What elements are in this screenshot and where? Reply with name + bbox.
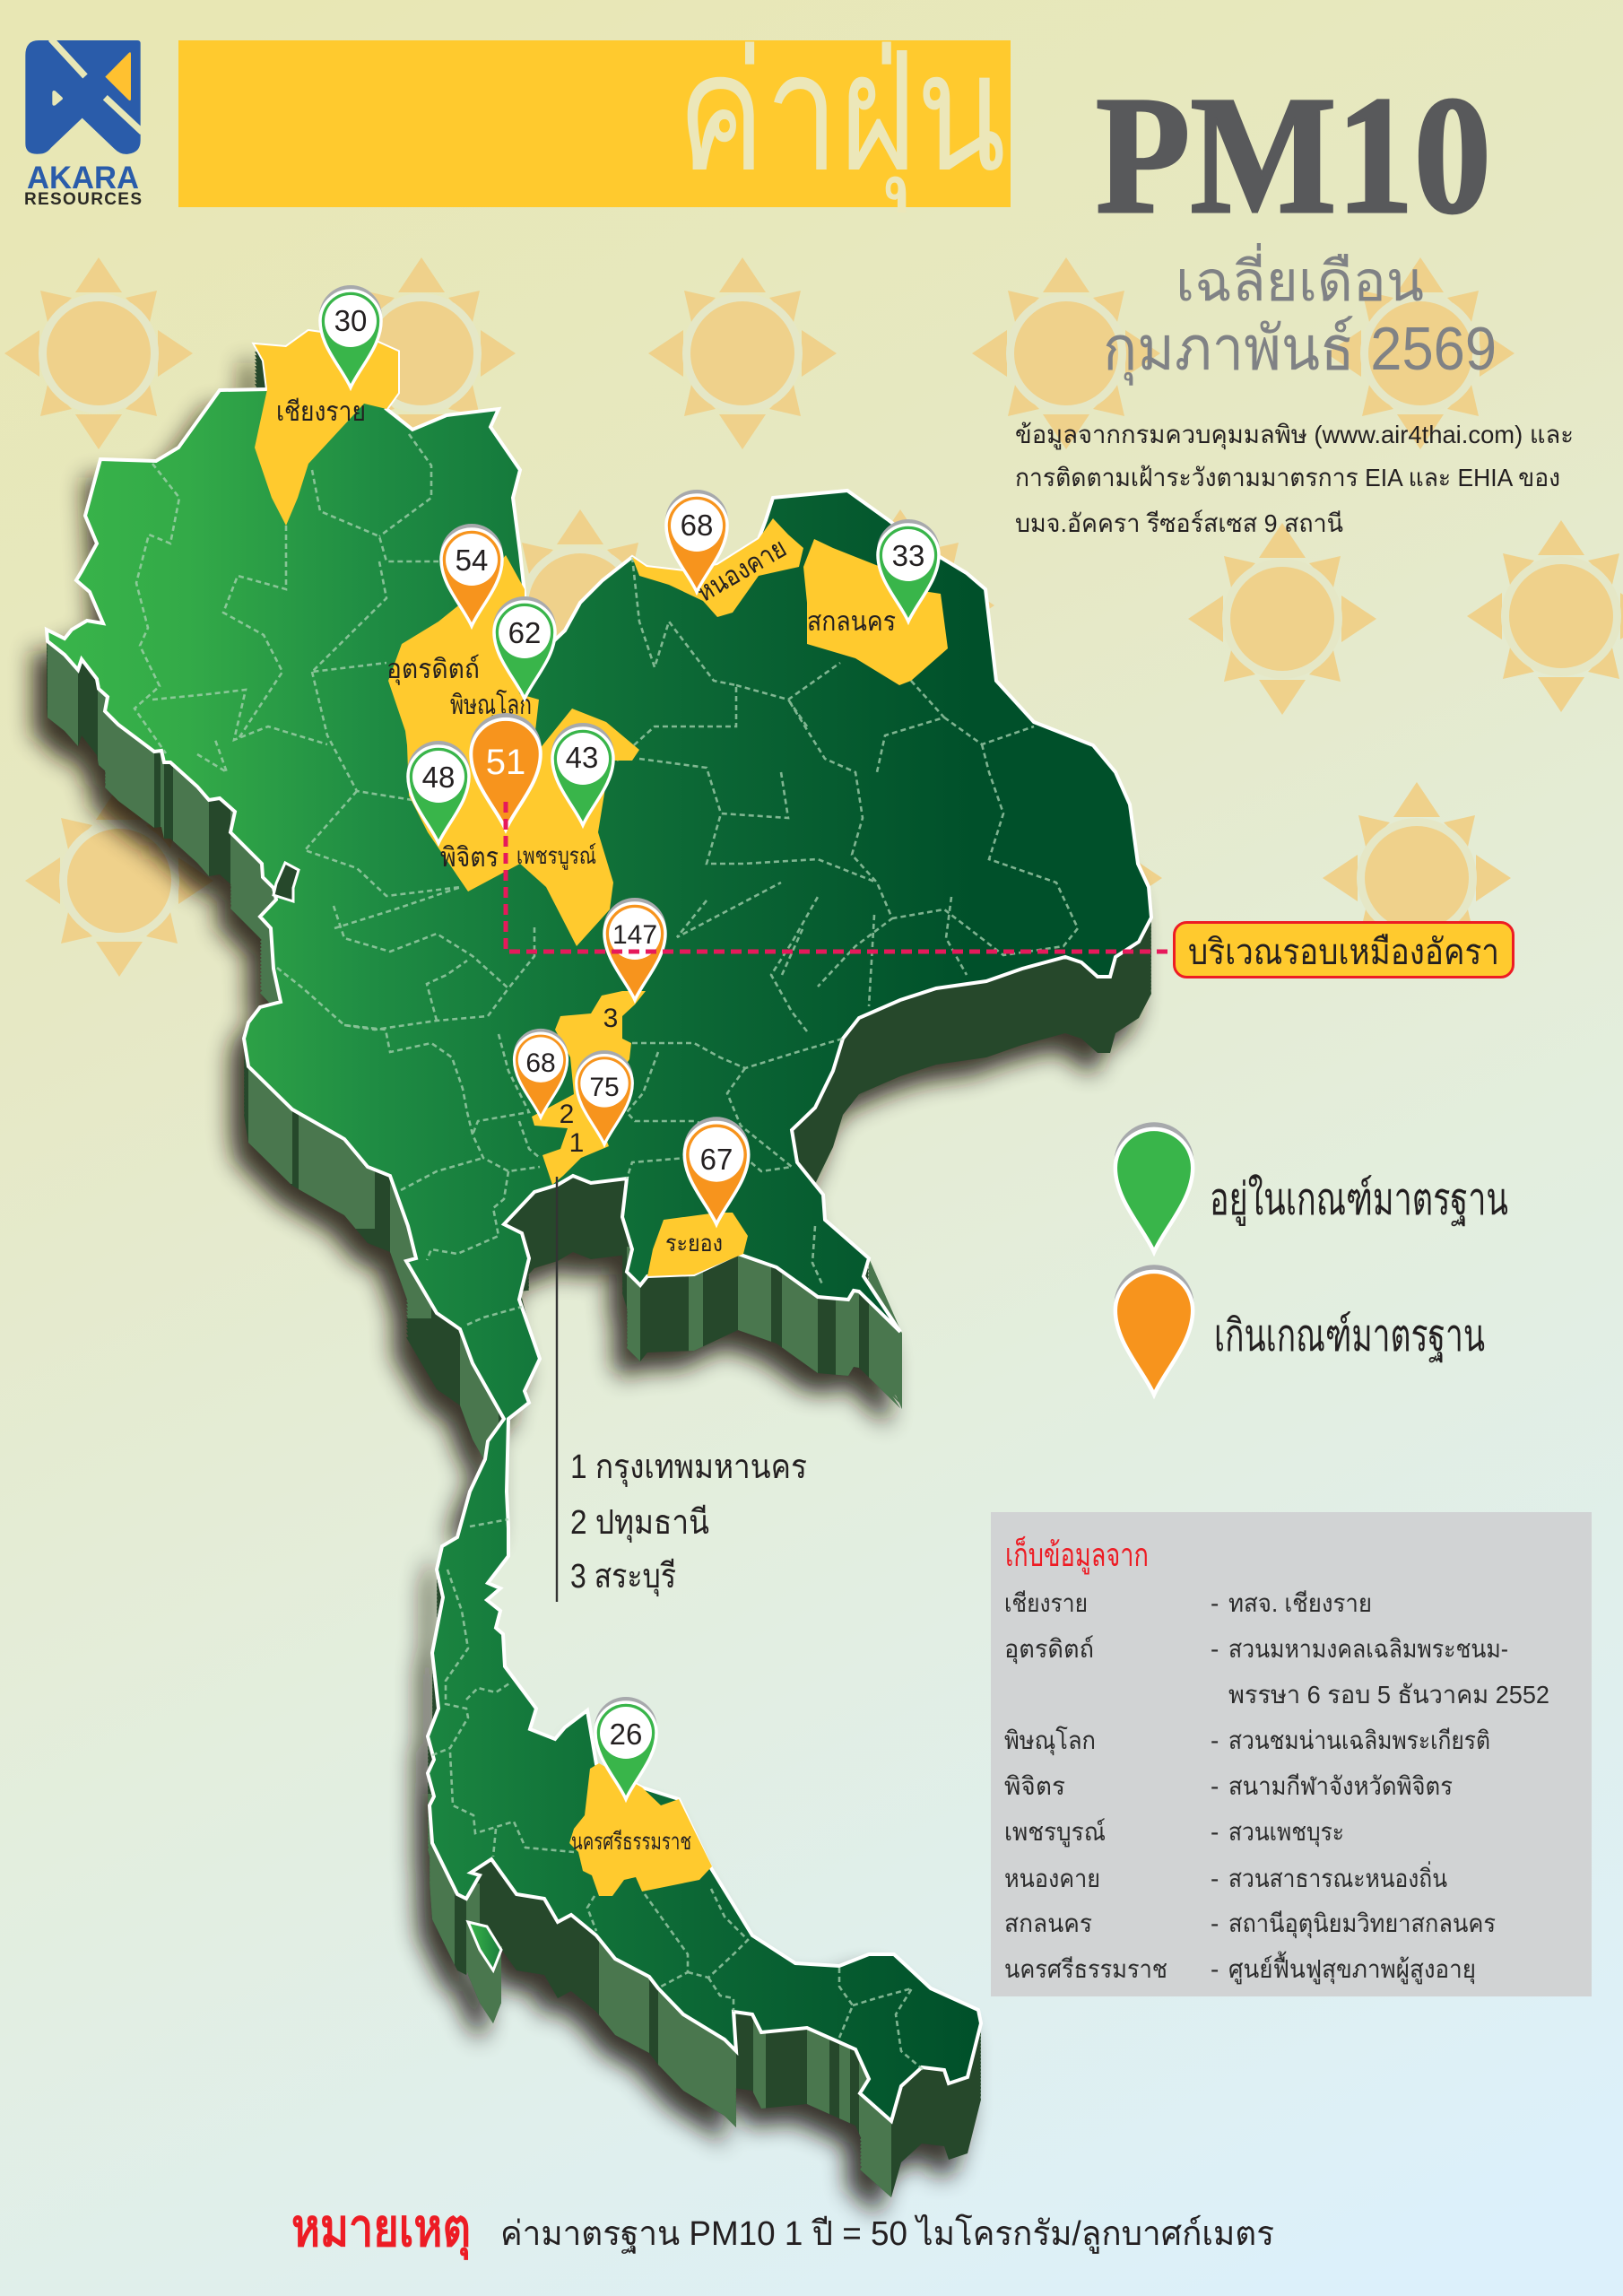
- panel rows: -: [1211, 1909, 1219, 1937]
- text block: data source: บมจ.อัคครา รีซอร์สเซส 9 สถานี: [1015, 509, 1343, 537]
- pin: Nong Khai 68: 68: [681, 509, 713, 542]
- map: Thailand 3D: [14, 328, 1157, 2226]
- logo: Akara Resources: AKARA: [27, 161, 139, 196]
- pin: Phetchabun 43: 43: [566, 741, 598, 774]
- pin: mine area 51: 51: [486, 743, 525, 782]
- pin: Nakhon Si Thammarat 26: [595, 1697, 657, 1799]
- title banner: ค่าฝุ่น: [677, 20, 1006, 213]
- panel rows: สถานีอุตุนิยมวิทยาสกลนคร: [1228, 1909, 1496, 1939]
- panel rows: หนองคาย: [1004, 1865, 1100, 1892]
- province labels: 3: [603, 1004, 618, 1033]
- legend: within standard: อยู่ในเกณฑ์มาตรฐาน: [1210, 1174, 1508, 1226]
- panel rows: ศูนย์ฟื้นฟูสุขภาพผู้สูงอายุ: [1228, 1951, 1476, 1985]
- province labels: พิจิตร: [440, 843, 499, 873]
- logo: Akara Resources: [24, 39, 143, 209]
- province labels: เพชรบูรณ์: [516, 842, 596, 870]
- pin: Uttaradit 54: [440, 524, 503, 626]
- highlighted provinces: [255, 331, 948, 1896]
- pin: Rayong 67: [683, 1117, 750, 1224]
- dashed callout connector: [506, 802, 1174, 952]
- panel rows: -: [1211, 1955, 1219, 1983]
- subheading: monthly average: เฉลี่ยเดือน: [1176, 243, 1424, 313]
- pin: Phichit 48: [407, 741, 470, 843]
- panel: data collection sites: [991, 1512, 1592, 1996]
- footer note: ค่ามาตรฐาน PM10 1 ปี = 50 ไมโครกรัม/ลูกบาศก์เมตร: [500, 2213, 1274, 2254]
- pin: Bangkok 75: 75: [589, 1073, 620, 1102]
- panel rows: สวนสาธารณะหนองถิ่น: [1228, 1861, 1447, 1892]
- panel rows: [1004, 1589, 1549, 1985]
- province group: Uttaradit Phitsanulok Phichit Phetchabun: [388, 555, 639, 946]
- province group: Saraburi Pathum Thani Bangkok: [532, 991, 646, 1185]
- panel rows: พิษณุโลก: [1004, 1726, 1096, 1756]
- list: numbered provinces: 3 สระบุรี: [570, 1558, 676, 1596]
- text block: data source: ข้อมูลจากกรมควบคุมมลพิษ (www.air4thai.com) และ: [1015, 421, 1574, 450]
- callout: mine surroundings: [1175, 922, 1514, 978]
- province labels: พิษณุโลก: [450, 689, 532, 722]
- lake near Tak: [273, 863, 299, 901]
- legend: over standard: เกินเกณฑ์มาตรฐาน: [1214, 1310, 1485, 1362]
- pin: Rayong 67: 67: [700, 1143, 733, 1176]
- panel rows: เพชรบูรณ์: [1004, 1818, 1106, 1848]
- list: numbered provinces: 1 กรุงเทพมหานคร: [570, 1448, 807, 1487]
- map top surface: [47, 331, 1151, 2121]
- province: Sakon Nakhon: [803, 539, 948, 685]
- province borders: [135, 434, 1078, 2070]
- province: Nong Khai: [632, 518, 803, 617]
- leader line to Bangkok list: [556, 1177, 558, 1602]
- legend: within standard: [1115, 1122, 1508, 1252]
- heading: PM10: PM10: [1096, 61, 1491, 248]
- callout: mine surroundings: บริเวณรอบเหมืองอัครา: [1188, 933, 1499, 972]
- pin: Pathum Thani 68: 68: [525, 1048, 556, 1078]
- panel heading: เก็บข้อมูลจาก: [1005, 1535, 1149, 1575]
- legend: over standard: [1115, 1265, 1485, 1395]
- panel rows: สกลนคร: [1004, 1909, 1092, 1937]
- panel rows: นครศรีธรรมราช: [1004, 1955, 1167, 1983]
- panel rows: เชียงราย: [1004, 1589, 1088, 1617]
- pin: Phitsanulok 62: [493, 596, 556, 699]
- pin: Nakhon Si Thammarat 26: 26: [610, 1718, 642, 1751]
- province labels: 1: [569, 1128, 584, 1158]
- province labels: ระยอง: [665, 1230, 723, 1257]
- panel rows: -: [1211, 1865, 1219, 1892]
- panel rows: สวนมหามงคลเฉลิมพระชนม-: [1228, 1635, 1508, 1663]
- province labels: หนองคาย: [691, 533, 792, 608]
- subheading: monthly average: [1103, 243, 1497, 386]
- panel rows: -: [1211, 1726, 1219, 1754]
- panel rows: สวนเพชบุระ: [1228, 1818, 1344, 1848]
- pin: Saraburi 147: [603, 898, 666, 1000]
- footer note: [291, 2199, 1274, 2261]
- pin: Phetchabun 43: [551, 723, 614, 825]
- province labels: สกลนคร: [807, 607, 896, 637]
- pin: Phitsanulok 62: 62: [508, 616, 541, 649]
- footer note: หมายเหตุ: [291, 2199, 471, 2261]
- list: numbered provinces: 2 ปทุมธานี: [570, 1504, 709, 1543]
- pin: Chiang Rai 30: [319, 285, 382, 387]
- province labels: อุตรดิตถ์: [386, 654, 480, 686]
- province: Rayong: [647, 1213, 748, 1276]
- pin: mine area 51: [470, 713, 542, 830]
- panel rows: -: [1211, 1635, 1219, 1663]
- pin: Phichit 48: 48: [422, 761, 455, 794]
- list: numbered provinces: [570, 1448, 807, 1596]
- map extrusion sides: [47, 348, 1151, 2197]
- panel rows: พรรษา 6 รอบ 5 ธันวาคม 2552: [1228, 1681, 1549, 1709]
- logo: Akara Resources: RESOURCES: [24, 190, 142, 209]
- province labels: เชียงราย: [276, 397, 366, 427]
- panel rows: -: [1211, 1772, 1219, 1800]
- panel rows: ทสจ. เชียงราย: [1228, 1589, 1372, 1617]
- subheading: monthly average: กุมภาพันธ์ 2569: [1103, 315, 1497, 386]
- pin: Nong Khai 68: [665, 490, 728, 592]
- background sun pattern: [4, 257, 1623, 977]
- pin: Uttaradit 54: 54: [456, 544, 488, 577]
- panel rows: สนามกีฬาจังหวัดพิจิตร: [1228, 1772, 1453, 1800]
- text block: data source: [1015, 421, 1574, 537]
- title banner: [178, 20, 1011, 213]
- province: Nakhon Si Thammarat: [569, 1763, 712, 1896]
- province labels: นครศรีธรรมราช: [571, 1828, 691, 1855]
- panel rows: สวนชมน่านเฉลิมพระเกียรติ: [1228, 1726, 1490, 1754]
- pin: Chiang Rai 30: 30: [334, 304, 367, 337]
- panel rows: -: [1211, 1818, 1219, 1846]
- panel rows: อุตรดิตถ์: [1004, 1635, 1094, 1665]
- text block: data source: การติดตามเฝ้าระวังตามมาตรการ EIA และ EHIA ของ: [1015, 464, 1560, 491]
- province: Chiang Rai: [255, 331, 398, 526]
- panel rows: พิจิตร: [1004, 1772, 1065, 1800]
- pin: Sakon Nakhon 33: [877, 519, 940, 622]
- panel rows: -: [1211, 1589, 1219, 1617]
- province labels: [276, 397, 896, 1855]
- pin: Sakon Nakhon 33: 33: [892, 539, 924, 572]
- pin: Bangkok 75: [576, 1050, 633, 1144]
- pin: Saraburi 147: 147: [612, 920, 657, 950]
- map shadow: [14, 348, 1157, 2226]
- province labels: 2: [560, 1100, 574, 1129]
- pin: Pathum Thani 68: [514, 1029, 568, 1118]
- island: Phuket: [468, 1922, 501, 1970]
